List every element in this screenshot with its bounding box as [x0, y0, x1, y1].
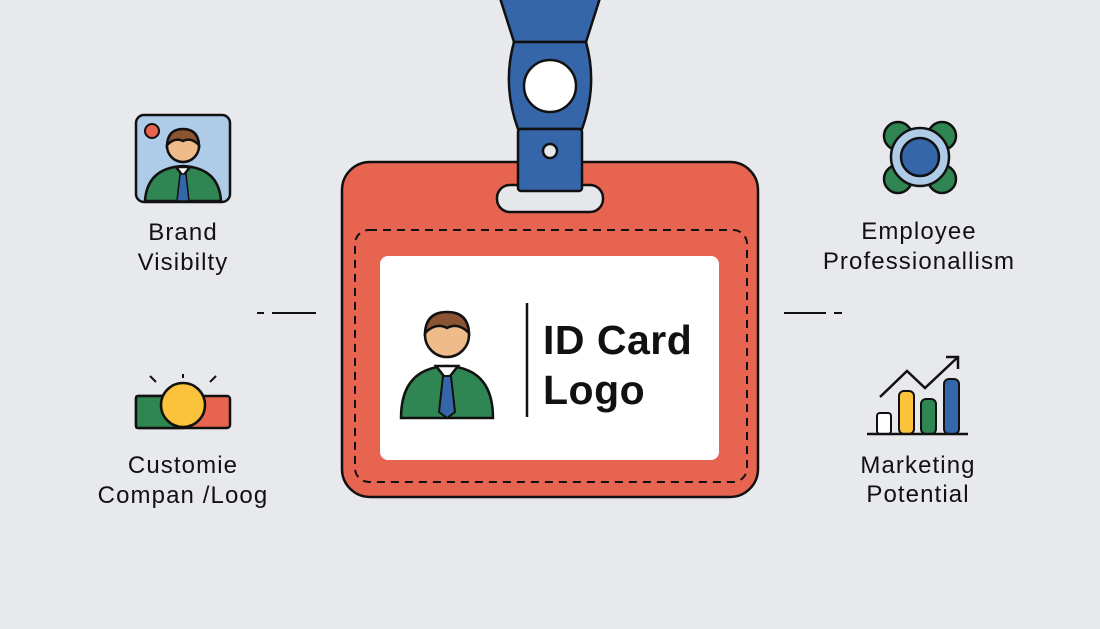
white insert [380, 256, 719, 460]
item: marketing potential: Potential [866, 481, 970, 508]
connector dashes [257, 312, 842, 314]
item: employee professionalism: Employee [861, 218, 977, 245]
icon: badge circle [884, 122, 956, 193]
title text: ID Card [543, 317, 692, 363]
item: customize company logo [98, 374, 268, 509]
id card badge: Logo [543, 367, 645, 413]
lanyard strap and clip [500, 0, 600, 191]
item: employee professionalism [823, 122, 1015, 275]
icon: logo bar with sun [136, 374, 230, 428]
item: brand visibility [136, 115, 230, 276]
item: marketing potential [860, 357, 976, 508]
item: customize company logo: Compan /Loog [98, 482, 268, 509]
card body [342, 162, 758, 497]
person avatar [401, 312, 493, 418]
item: employee professionalism: Professionallism [823, 248, 1015, 275]
icon: bar chart with arrow [867, 357, 968, 434]
item: marketing potential: Marketing [860, 452, 976, 479]
item: brand visibility: Visibilty [138, 249, 228, 276]
item: customize company logo: Customie [128, 452, 238, 479]
item: brand visibility: Brand [148, 219, 218, 246]
icon: photo frame [136, 115, 230, 202]
id card badge [342, 0, 758, 497]
